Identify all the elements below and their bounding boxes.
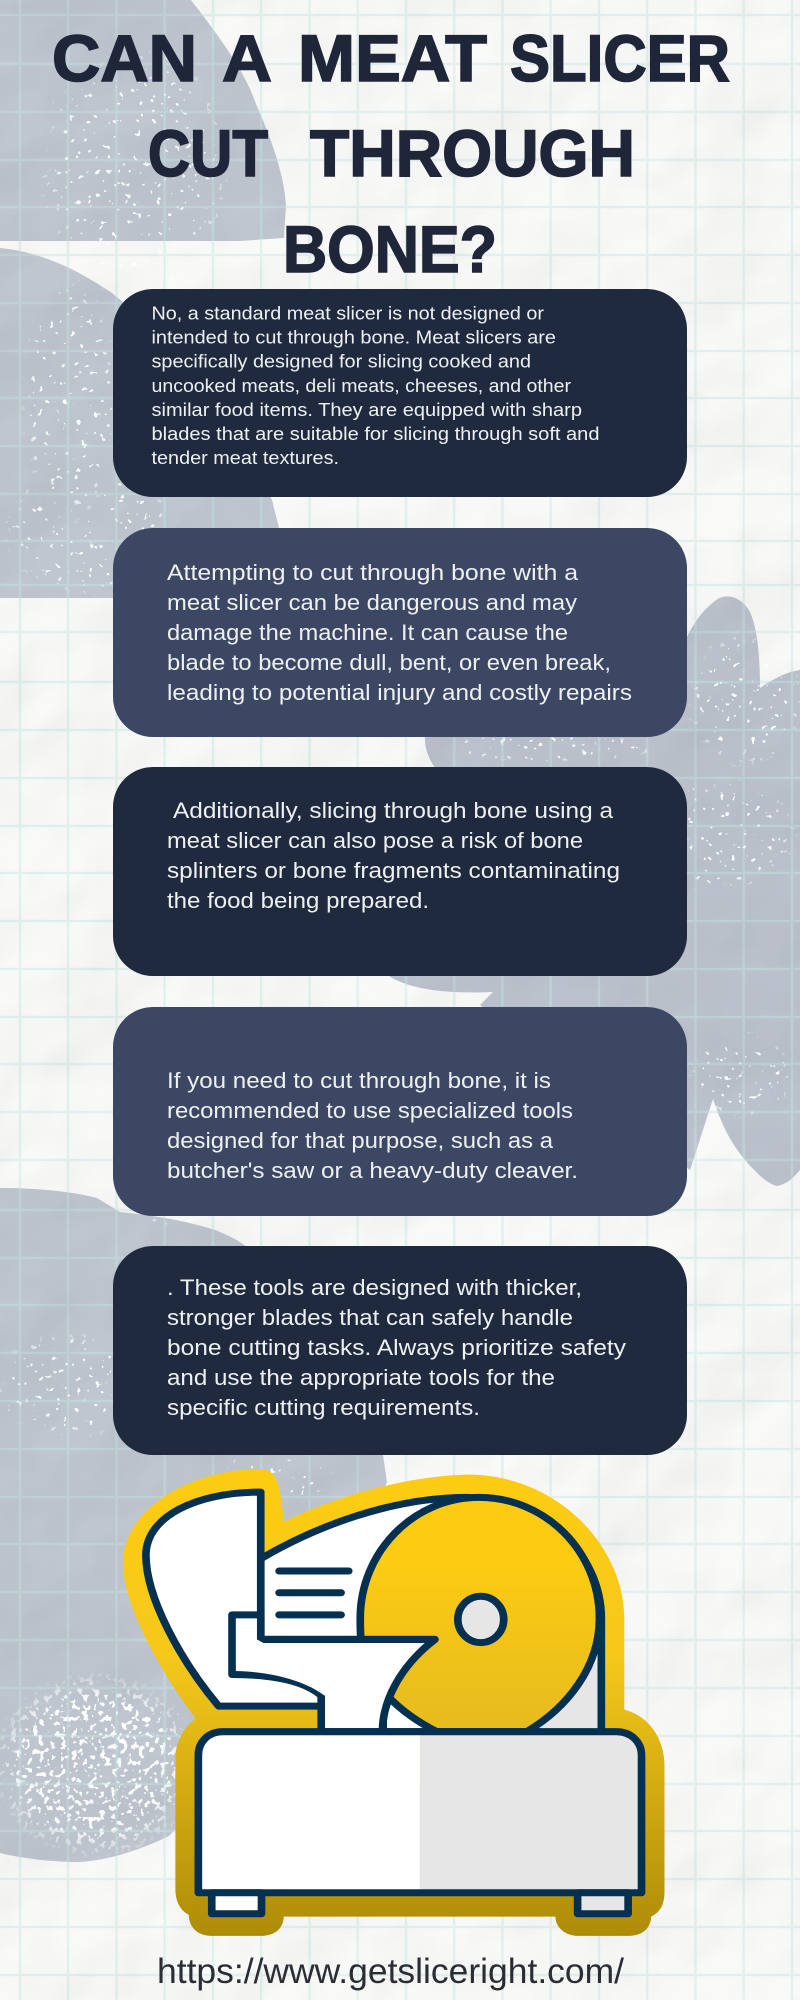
panel: stronger blades: bone cutting tasks. Always prioritize safety xyxy=(167,1335,626,1360)
panel: stronger blades: specific cutting requirements. xyxy=(167,1395,480,1420)
slicer back body xyxy=(261,1497,601,1732)
title: BONE? xyxy=(283,212,497,286)
panel: specialized tools xyxy=(113,1007,687,1216)
title: SLICER xyxy=(510,21,730,95)
panel: danger: damage the machine. It can cause the xyxy=(167,620,568,645)
grey blob bottom left xyxy=(0,1188,387,1862)
title: THROUGH xyxy=(310,116,635,190)
panel: stronger blades xyxy=(113,1246,687,1455)
blade disk xyxy=(360,1497,599,1732)
base white half xyxy=(198,1732,420,1893)
panel: specialized tools: butcher's saw or a heavy-duty cleaver. xyxy=(167,1158,578,1183)
shaded body corner xyxy=(540,1660,598,1729)
grey blob top left xyxy=(0,0,286,241)
right foot xyxy=(578,1893,628,1914)
title: MEAT xyxy=(298,21,487,95)
title: A xyxy=(222,21,272,95)
panel: danger: Attempting to cut through bone with a xyxy=(167,560,579,585)
cut marks xyxy=(279,1571,349,1615)
grey blob right xyxy=(389,596,800,1186)
hub xyxy=(458,1596,504,1643)
white cover over carriage seam xyxy=(236,1618,368,1696)
panel: stronger blades: and use the appropriate tools for the xyxy=(167,1365,555,1390)
panel: not designed for bone: similar food items. They are equipped with sharp xyxy=(152,399,582,420)
title xyxy=(52,21,730,286)
panel: contamination: meat slicer can also pose a risk of bone xyxy=(167,828,583,853)
panel: contamination: splinters or bone fragments contaminating xyxy=(167,858,620,883)
base outline xyxy=(198,1732,642,1893)
grey blob middle left xyxy=(0,248,282,598)
panel: danger: meat slicer can be dangerous and may xyxy=(167,590,577,615)
panel: danger xyxy=(113,528,687,737)
title: CAN xyxy=(52,21,197,95)
panel: not designed for bone: uncooked meats, deli meats, cheeses, and other xyxy=(152,375,571,396)
panel: specialized tools: If you need to cut through bone, it is xyxy=(167,1068,551,1093)
panel: stronger blades: . These tools are designed with thicker, xyxy=(167,1275,582,1300)
panel: not designed for bone xyxy=(113,289,687,497)
handle guard xyxy=(146,1492,321,1706)
panel: not designed for bone: tender meat textures. xyxy=(152,447,339,468)
icon: meat slicer xyxy=(123,1469,664,1936)
panel: contamination xyxy=(113,767,687,976)
panel: stronger blades: stronger blades that can safely handle xyxy=(167,1305,573,1330)
website url: https://www.getsliceright.com/ xyxy=(157,1952,624,1991)
panel: specialized tools: recommended to use specialized tools xyxy=(167,1098,573,1123)
left foot xyxy=(212,1893,261,1914)
food carriage xyxy=(232,1615,435,1732)
panel: not designed for bone: blades that are suitable for slicing through soft and xyxy=(152,423,600,444)
panel: danger: blade to become dull, bent, or even break, xyxy=(167,650,611,675)
panel: not designed for bone: No, a standard meat slicer is not designed or xyxy=(152,302,544,324)
panel: specialized tools: designed for that purpose, such as a xyxy=(167,1128,554,1153)
title: CUT xyxy=(148,116,268,190)
panel: contamination: Additionally, slicing through bone using a xyxy=(173,798,614,823)
base grey half xyxy=(420,1732,642,1893)
panel: not designed for bone: intended to cut through bone. Meat slicers are xyxy=(152,327,556,348)
panel: contamination: the food being prepared. xyxy=(167,888,429,913)
sticker halo xyxy=(123,1469,664,1936)
panel: danger: leading to potential injury and costly repairs xyxy=(167,680,632,705)
panel: not designed for bone: specifically designed for slicing cooked and xyxy=(152,351,531,372)
